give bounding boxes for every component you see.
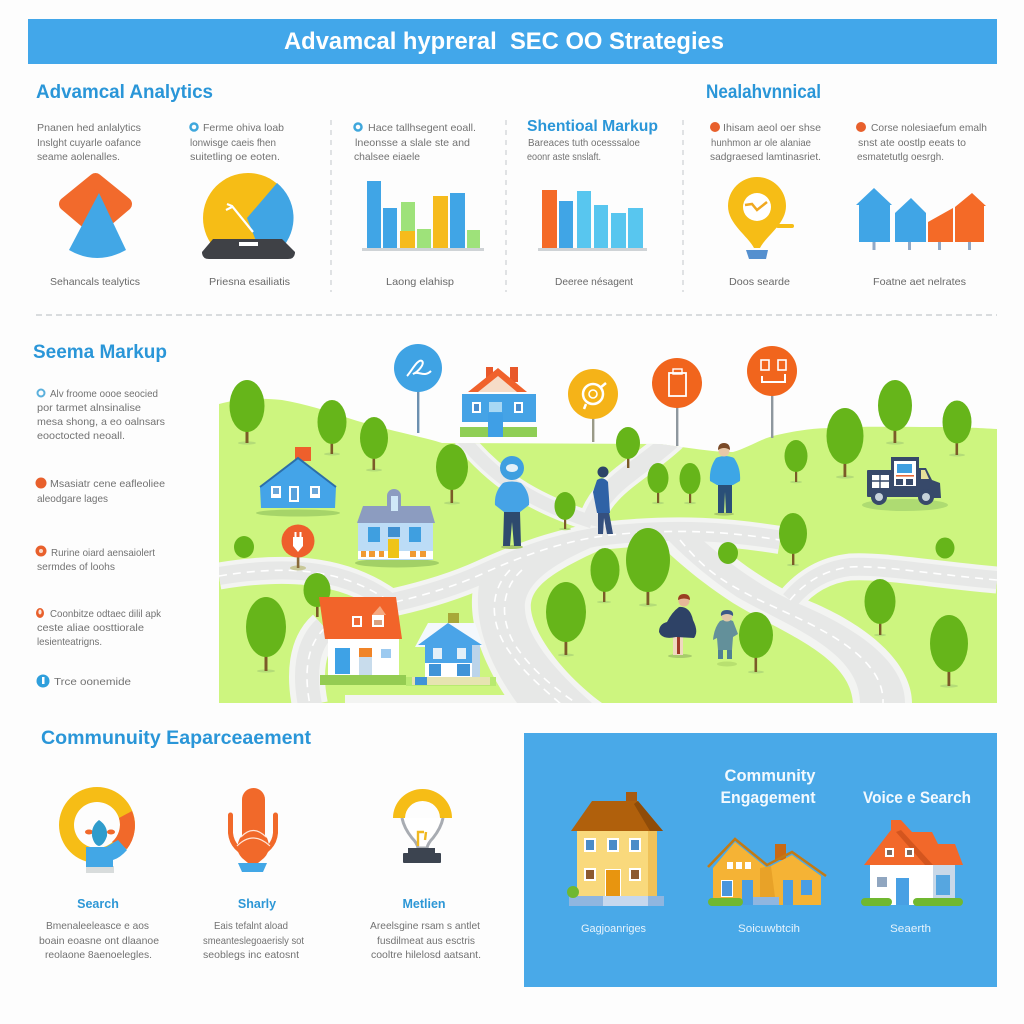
panel: schema markup list — [33, 342, 167, 688]
column 1 text: Pnanen hed anlalytics — [37, 122, 141, 134]
text: search: reolaone 8aenoelegles. — [45, 949, 152, 961]
panel: community engagement — [39, 728, 481, 961]
column 6 text: esmatetutlg oesrgh. — [857, 151, 944, 163]
house: bottom blue — [406, 613, 496, 686]
icon: location pin bulb — [728, 177, 794, 259]
column 2 text: suitetling oe eoten. — [190, 151, 280, 163]
icon: search ring with figure — [59, 787, 135, 873]
house: yellow tall — [567, 792, 664, 906]
list item 5 — [36, 674, 131, 688]
person: teal — [713, 610, 738, 666]
icon: diamond and cone — [66, 180, 126, 258]
heading: schema markup: Seema Markup — [33, 342, 167, 363]
text: metlien — [370, 920, 481, 961]
roads — [219, 438, 997, 712]
column 5 text: Ihisam aeol oer shse — [723, 122, 821, 134]
text: sharly: smeanteslegoaerisly sot — [203, 935, 304, 947]
column 3 text — [354, 122, 476, 163]
text: sharly: seoblegs inc eatosnt — [203, 949, 299, 961]
icon: microphone — [230, 788, 276, 872]
caption 5: Doos searde — [729, 276, 790, 288]
map land — [219, 399, 997, 703]
list item 1: eooctocted neoall. — [37, 430, 125, 442]
column 5 text: sadgraesed lamtinasriet. — [710, 151, 821, 163]
list item 2: Msasiatr cene eafleoliee — [50, 478, 165, 490]
text: search — [39, 920, 159, 961]
list item 4 — [36, 608, 162, 648]
list item 3: sermdes of loohs — [37, 561, 115, 573]
bar chart 2 — [538, 190, 647, 251]
house: left blue — [256, 447, 340, 516]
person: blue sweater — [710, 443, 740, 516]
label: engagements: Gagjoanriges — [581, 923, 646, 935]
caption 4: Deeree nésagent — [555, 276, 633, 288]
column 6 text — [856, 122, 987, 163]
house: top blue — [460, 367, 537, 437]
house: middle — [355, 489, 439, 568]
icon: gauge pie — [202, 173, 295, 263]
heading: community engagement: Community — [724, 767, 816, 785]
text: metlien: Areelsgine rsam s antlet — [370, 920, 480, 932]
label: sharly: Sharly — [238, 897, 276, 911]
list item 1 — [37, 388, 165, 442]
house: double orange — [708, 839, 826, 906]
person: blue with bubble — [495, 456, 529, 549]
caption 1: Sehancals tealytics — [50, 276, 140, 288]
pin: small orange — [282, 524, 314, 570]
text: sharly — [203, 920, 304, 961]
column 6 text: snst ate oostlp eeats to — [858, 137, 966, 149]
list item 4: ceste aliae oosttiorale — [37, 622, 144, 634]
list item 5: Trce oonemide — [54, 676, 131, 688]
pin: orange clipboard — [652, 358, 702, 446]
list item 4: Coonbitze odtaec dilil apk — [50, 608, 162, 620]
column 5 text: hunhmon ar ole alaniae — [711, 137, 811, 149]
heading: neighbourhood: Nealahvnnical — [706, 82, 821, 103]
list item 2: aleodgare lages — [37, 493, 108, 505]
text: metlien: fusdilmeat aus esctris — [377, 935, 475, 947]
panel: blue houses — [524, 733, 997, 987]
caption 2: Priesna esailiatis — [209, 276, 290, 288]
panel: advanced analytics strip — [36, 82, 997, 315]
pin: orange network — [747, 346, 797, 438]
heading: semantic markup: Shentioal Markup — [527, 118, 658, 135]
list item 1: Alv froome oooe seocied — [50, 388, 158, 400]
person: walker — [593, 466, 613, 534]
list item 1: por tarmet alnsinalise — [37, 402, 141, 414]
bar chart 1 — [362, 181, 484, 251]
pin: blue analytics — [394, 344, 442, 433]
heading: advanced analytics: Advamcal Analytics — [36, 82, 213, 103]
heading: community engagement: Communuity Eaparceaement — [41, 728, 312, 749]
heading: voice search: Voice e Search — [863, 789, 971, 807]
column 4 text: eoonr aste snslaft. — [527, 151, 601, 163]
text: metlien: cooltre hilelosd aatsant. — [371, 949, 481, 961]
list item 3 — [36, 546, 155, 573]
column 3 text: chalsee eiaele — [354, 151, 420, 163]
column 3 text: lneonsse a slale ste and — [355, 137, 470, 149]
column 4 text — [527, 137, 640, 163]
divider lines — [36, 120, 997, 315]
house: red roof — [861, 820, 963, 906]
label: metlien: Metlien — [402, 897, 446, 911]
text: search: Bmenaleeleasce e aos — [46, 920, 149, 932]
icon: house bars — [856, 188, 986, 250]
label: search: Seaerth — [890, 923, 931, 935]
list item 2 — [36, 478, 165, 505]
heading: community engagement — [720, 767, 816, 807]
caption 6: Foatne aet nelrates — [873, 276, 966, 288]
title banner — [28, 19, 997, 64]
column 3 text: Hace tallhsegent eoall. — [368, 122, 476, 134]
list item 4: lesienteatrigns. — [37, 636, 102, 648]
panel: neighbourhood map — [219, 344, 997, 712]
column 1 text: Inslght cuyarle oafance — [37, 137, 141, 149]
house: bottom orange — [319, 597, 406, 685]
icon: lightbulb — [393, 789, 452, 863]
list item 1: mesa shong, a eo oalnsars — [37, 416, 165, 428]
column 1 text — [37, 122, 141, 163]
truck — [862, 457, 948, 511]
pin: yellow target — [568, 369, 618, 442]
caption 3: Laong elahisp — [386, 276, 454, 288]
column 2 text: lonwisge caeis fhen — [190, 137, 276, 149]
label: solutions: Soicuwbtcih — [738, 923, 800, 935]
label: search: Search — [77, 897, 119, 911]
list item 3: Rurine oiard aensaiolert — [51, 547, 155, 559]
column 2 text: Ferme ohiva loab — [203, 122, 284, 134]
column 4 text: Bareaces tuth ocesssaloe — [528, 137, 640, 149]
column 1 text: seame aolenalles. — [37, 151, 120, 163]
title banner: Advamcal hypreral SEC OO Strategies — [284, 28, 724, 55]
column 6 text: Corse nolesiaefum emalh — [871, 122, 987, 134]
text: search: boain eoasne ont dlaanoe — [39, 935, 159, 947]
column 2 text — [190, 122, 284, 163]
heading: community engagement: Engagement — [720, 789, 816, 807]
column 5 text — [710, 122, 821, 163]
trees — [230, 380, 972, 688]
text: sharly: Eais tefalnt aload — [214, 920, 288, 932]
person: cloak — [659, 594, 696, 658]
